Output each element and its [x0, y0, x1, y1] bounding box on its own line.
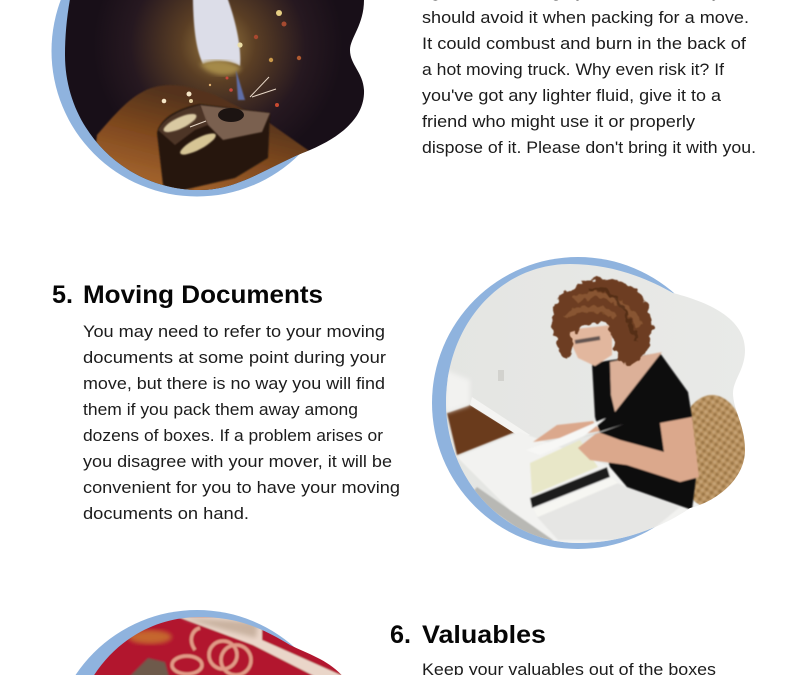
panel: lighter fluid text: dispose of it. Please don't bring it with you.	[422, 138, 756, 157]
body text: moving documents: documents at some point during your	[83, 348, 386, 367]
photo: woman reading binder	[446, 264, 745, 543]
hair	[553, 279, 652, 365]
photo: lighter with flame	[65, 0, 364, 190]
heading: valuables: 6.	[390, 621, 411, 649]
panel: lighter fluid text: you've got any lighter fluid, give it to a	[422, 86, 722, 105]
panel: lighter fluid text: It could combust and burn in the back of	[422, 34, 746, 53]
blue circle accent	[76, 610, 294, 675]
body text: moving documents: convenient for you to have your moving	[83, 478, 400, 497]
body text: moving documents: dozens of boxes. If a problem arises or	[83, 426, 383, 445]
blue circle accent	[52, 0, 342, 196]
blue circle accent	[432, 257, 724, 549]
panel: valuables photo	[76, 610, 342, 675]
panel: lighter fluid photo	[50, 0, 380, 200]
panel: moving documents photo	[432, 257, 745, 549]
panel: valuables text	[390, 621, 716, 675]
heading: moving documents: 5.	[52, 281, 73, 309]
body text: moving documents: move, but there is no way you will find	[83, 374, 385, 393]
body text: moving documents: you disagree with your mover, it will be	[83, 452, 392, 471]
body text: moving documents: them if you pack them away among	[83, 400, 358, 419]
binder with pages	[458, 434, 700, 543]
panel: lighter fluid text: should avoid it when packing for a move.	[422, 8, 749, 27]
body text: moving documents	[83, 322, 400, 523]
heading: valuables: Valuables	[422, 621, 546, 649]
panel: lighter fluid text	[422, 0, 756, 157]
woman	[526, 325, 699, 510]
panel: moving documents text	[52, 281, 400, 523]
photo: jewelry on red tray	[94, 617, 342, 675]
body text: moving documents: You may need to refer to your moving	[83, 322, 385, 341]
body text: moving documents: documents on hand.	[83, 504, 249, 523]
panel: lighter fluid text: friend who might use it or properly	[422, 112, 696, 131]
panel: lighter fluid text: a hot moving truck. Why even risk it? If	[422, 60, 724, 79]
heading: moving documents: Moving Documents	[83, 281, 323, 309]
